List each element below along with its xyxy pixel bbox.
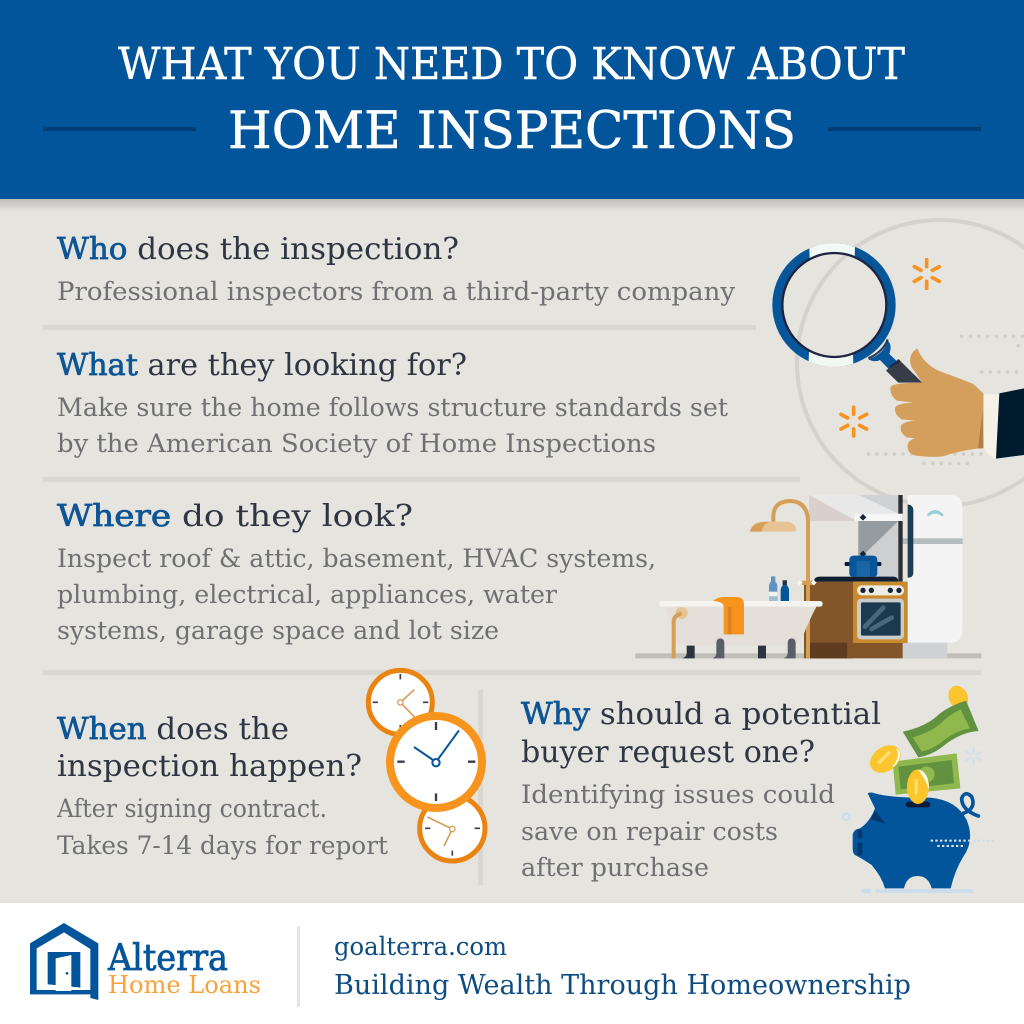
when heading: [57, 712, 362, 783]
why text: Identifying issues could: [521, 780, 835, 809]
small clock bottom: [420, 796, 485, 861]
why heading: Why should a potential: [521, 697, 881, 731]
when text: Takes 7-14 days for report: [57, 831, 388, 860]
icon: clocks: [368, 670, 485, 861]
what text: by the American Society of Home Inspections: [57, 429, 656, 458]
large clock: [390, 716, 482, 808]
when heading: When does the: [57, 712, 289, 746]
why text: after purchase: [521, 853, 709, 882]
logo: Alterra: [107, 938, 228, 979]
icon: magnifying glass in hand: [777, 243, 1024, 463]
why heading: buyer request one?: [521, 735, 815, 769]
who heading: Who does the inspection?: [57, 232, 459, 266]
logo: [30, 923, 261, 1000]
title line 1: WHAT YOU NEED TO KNOW ABOUT: [118, 39, 905, 90]
title line 2: HOME INSPECTIONS: [228, 102, 796, 161]
header banner: [0, 0, 1024, 199]
small clock top: [368, 670, 432, 734]
what heading: What are they looking for?: [57, 348, 467, 382]
hand: [890, 348, 983, 457]
when text: [56, 794, 388, 860]
panel: what: [57, 348, 728, 458]
why text: save on repair costs: [521, 817, 778, 846]
when heading: inspection happen?: [57, 749, 362, 783]
where text: [57, 544, 656, 645]
logo: Home Loans: [108, 971, 261, 999]
icon: bathroom and kitchen: [635, 495, 981, 658]
footer: [0, 903, 1024, 1024]
where text: systems, garage space and lot size: [57, 616, 499, 645]
panel: why: [521, 697, 881, 882]
who text: Professional inspectors from a third-party company: [57, 277, 736, 306]
panel: who: [57, 232, 736, 306]
website: goalterra.com: [334, 932, 507, 961]
where text: Inspect roof & attic, basement, HVAC systems,: [57, 544, 656, 573]
what text: [57, 393, 728, 458]
panel: where: [57, 499, 656, 645]
icon: house with open door: [30, 923, 98, 1000]
where text: plumbing, electrical, appliances, water: [57, 580, 557, 609]
where heading: Where do they look?: [57, 499, 413, 533]
panel: when: [56, 712, 388, 860]
what text: Make sure the home follows structure standards set: [57, 393, 728, 422]
when text: After signing contract.: [56, 794, 327, 823]
icon: piggy bank with money: [843, 683, 996, 893]
why heading: [521, 697, 881, 769]
tagline: Building Wealth Through Homeownership: [334, 970, 911, 1001]
why text: [521, 780, 835, 882]
